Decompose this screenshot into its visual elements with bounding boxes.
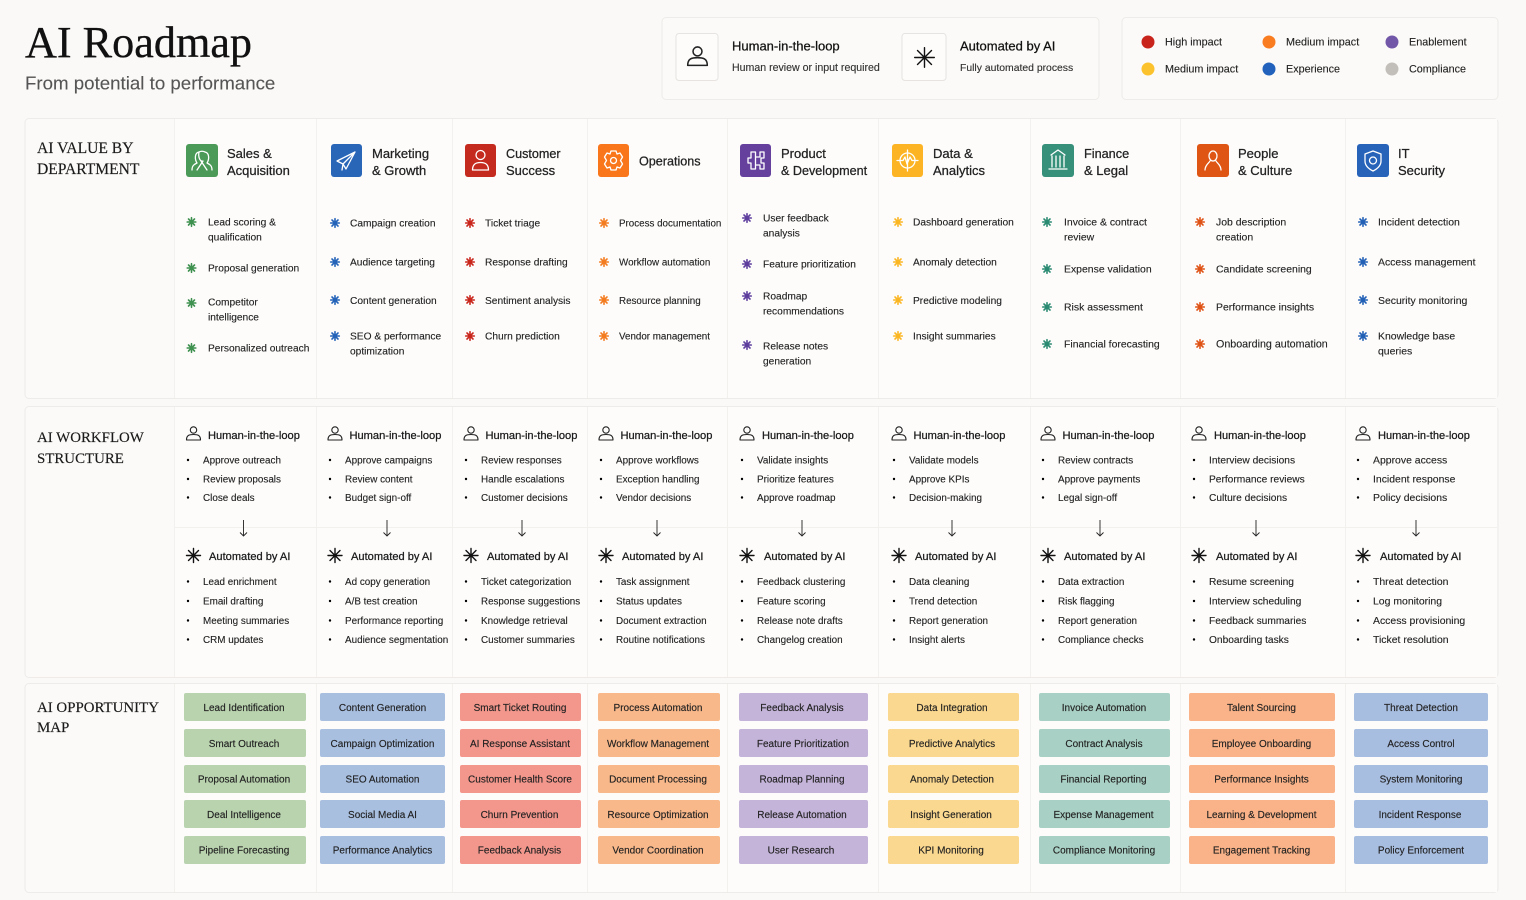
panel: AI opportunity map (25, 684, 1498, 892)
workflow: IT Security: Automated by AI (1380, 551, 1461, 563)
workflow: Product: Feature scoring (757, 596, 826, 608)
icon: customer (465, 144, 496, 177)
heading: Finance & Legal: Finance (1084, 147, 1129, 161)
list: operations value: Resource planning (619, 296, 701, 307)
list: IT value: Access management (1378, 258, 1476, 268)
workflow: Finance: Legal sign-off (1058, 493, 1117, 504)
list: IT value: Incident detection (1378, 218, 1460, 228)
opportunity column: Product: User Research (768, 846, 834, 856)
workflow: Marketing (328, 427, 448, 646)
heading: AI value by department: AI VALUE BY (37, 140, 133, 157)
list: customer value: Churn prediction (485, 332, 560, 342)
list: product value: User feedback (763, 214, 830, 224)
workflow: People (1192, 427, 1306, 646)
list: marketing value: SEO & performance (350, 332, 441, 342)
workflow: Product: Human-in-the-loop (762, 430, 854, 442)
heading: People & Culture: & Culture (1238, 163, 1292, 178)
workflow: IT Security: Threat detection (1373, 577, 1449, 588)
list: finance value: Risk assessment (1064, 302, 1143, 314)
workflow: People: Onboarding tasks (1209, 635, 1289, 646)
subtitle: From potential to performance (25, 72, 275, 94)
list: sales value: Lead scoring & (208, 218, 276, 228)
workflow: Data: Trend detection (909, 596, 977, 608)
opportunity column: Marketing: Content Generation (339, 703, 426, 714)
workflow: Operations: Document extraction (616, 616, 707, 627)
opportunity column: Sales: Smart Outreach (209, 739, 279, 750)
workflow: Customer Success: Ticket categorization (481, 577, 571, 588)
workflow: Marketing: Budget sign-off (345, 493, 412, 504)
workflow: Sales: Meeting summaries (203, 616, 289, 627)
opportunity column: Customer Success: AI Response Assistant (470, 739, 570, 750)
workflow: Operations: Approve workflows (616, 456, 699, 466)
list: IT value: Security monitoring (1378, 296, 1468, 307)
workflow: Marketing: Approve campaigns (345, 456, 432, 466)
workflow: Operations (599, 427, 712, 646)
list: marketing value: optimization (350, 346, 404, 358)
opportunity column: IT Security: Threat Detection (1384, 703, 1458, 714)
opportunity column: IT Security: Incident Response (1379, 810, 1462, 821)
icon: bank building (1042, 144, 1074, 177)
list: operations value: Workflow automation (619, 258, 710, 268)
list: product value: analysis (763, 228, 800, 240)
list: data value: Dashboard generation (913, 218, 1014, 228)
workflow: IT Security: Human-in-the-loop (1378, 430, 1470, 442)
workflow: Sales: Email drafting (203, 596, 263, 608)
opportunity column: Customer Success: Churn Prevention (481, 810, 558, 821)
opportunity column: Sales: Deal Intelligence (207, 810, 281, 821)
workflow: Sales: Human-in-the-loop (208, 430, 300, 442)
workflow: Customer Success: Automated by AI (487, 551, 568, 563)
list: data value (894, 218, 1014, 342)
workflow: IT Security (1356, 427, 1470, 646)
workflow: Operations: Vendor decisions (616, 493, 691, 504)
opportunity column: People: Performance Insights (1214, 774, 1309, 786)
workflow: Sales: Review proposals (203, 474, 281, 486)
legend label: automated by AI (960, 38, 1073, 74)
icon: automated star (902, 34, 946, 80)
list: people value: Candidate screening (1216, 264, 1312, 276)
department: Product & Development (740, 144, 868, 368)
workflow: Product: Validate insights (757, 456, 828, 466)
workflow: People: Resume screening (1209, 577, 1294, 588)
workflow: Finance: Compliance checks (1058, 635, 1144, 646)
heading: AI opportunity map: MAP (37, 720, 69, 736)
workflow: People: Interview scheduling (1209, 596, 1302, 608)
heading: AI workflow structure: AI WORKFLOW (37, 430, 145, 446)
list: finance value (1043, 218, 1160, 350)
heading: AI workflow structure: STRUCTURE (37, 451, 124, 467)
heading: Product & Development: & Development (781, 164, 868, 178)
department: Marketing & Growth (331, 144, 441, 358)
list: product value: Release notes (763, 342, 828, 352)
icon: paper plane (331, 144, 362, 177)
icon: gear (598, 144, 629, 177)
workflow: Marketing: Human-in-the-loop (350, 430, 441, 442)
workflow: Sales: CRM updates (203, 635, 263, 646)
list: product value: Roadmap (763, 292, 808, 302)
heading: Sales & Acquisition: Sales & (227, 146, 272, 161)
workflow: Finance: Human-in-the-loop (1062, 430, 1154, 442)
workflow: Operations: Routine notifications (616, 635, 705, 646)
opportunity column: Data: Data Integration (916, 703, 988, 714)
workflow: People: Human-in-the-loop (1214, 430, 1306, 442)
list: product value: recommendations (763, 306, 844, 318)
heading: Data & Analytics: Data & (933, 146, 973, 161)
workflow: Data (892, 427, 1005, 646)
workflow: Finance: Automated by AI (1064, 551, 1145, 563)
heading: IT Security: Security (1398, 163, 1445, 178)
workflow: Marketing: Automated by AI (351, 551, 432, 563)
opportunity column: Product: Feedback Analysis (760, 703, 844, 714)
icon: data target (892, 144, 923, 177)
list: people value: creation (1216, 232, 1253, 244)
list: product value (743, 214, 856, 368)
opportunity column: Sales (184, 693, 306, 864)
workflow: Product: Feedback clustering (757, 577, 845, 588)
workflow: Data: Decision-making (909, 493, 982, 504)
workflow: Operations: Task assignment (616, 577, 690, 588)
workflow: Marketing: Ad copy generation (345, 577, 430, 588)
heading: Sales & Acquisition: Acquisition (227, 163, 290, 178)
opportunity column: Customer Success: Feedback Analysis (478, 846, 561, 856)
workflow: Operations: Automated by AI (622, 551, 703, 563)
workflow: Data: Report generation (909, 616, 988, 627)
opportunity column: IT Security: Policy Enforcement (1378, 846, 1464, 856)
workflow: Customer Success: Response suggestions (481, 596, 580, 608)
list: data value: Insight summaries (913, 332, 996, 342)
icon: product modules (740, 144, 771, 177)
opportunity column: Product (739, 693, 868, 864)
heading: AI opportunity map: AI OPPORTUNITY (37, 700, 159, 716)
opportunity column: Finance: Contract Analysis (1065, 739, 1143, 750)
panel: AI value by department (25, 118, 1498, 398)
opportunity column: Operations: Resource Optimization (607, 810, 709, 821)
list: customer value: Sentiment analysis (485, 296, 571, 307)
list: operations value: Process documentation (619, 218, 721, 230)
workflow: Marketing: Performance reporting (345, 616, 443, 627)
heading: Finance & Legal: & Legal (1084, 163, 1128, 178)
workflow: IT Security: Access provisioning (1373, 616, 1465, 627)
opportunity column: People: Employee Onboarding (1212, 739, 1311, 750)
workflow: Sales: Lead enrichment (203, 577, 277, 588)
workflow: IT Security: Log monitoring (1373, 596, 1442, 608)
department: Operations (598, 144, 721, 342)
legend label: human-in-the-loop: Human review or input required (732, 62, 880, 74)
department: IT Security (1357, 144, 1476, 358)
list: people value: Onboarding automation (1216, 338, 1328, 350)
opportunity column: Product: Release Automation (757, 810, 847, 821)
opportunity column: Product: Roadmap Planning (759, 774, 845, 786)
list: product value: Feature prioritization (763, 260, 856, 270)
list: customer value: Ticket triage (485, 218, 540, 230)
heading: AI value by department: DEPARTMENT (37, 161, 140, 178)
legend label: human-in-the-loop (732, 38, 880, 74)
department: People & Culture (1196, 144, 1328, 350)
legend: impact colours: Compliance (1409, 64, 1466, 76)
department: Data & Analytics (892, 144, 1014, 342)
opportunity column: IT Security: Access Control (1387, 739, 1455, 750)
workflow: Sales: Approve outreach (203, 456, 281, 466)
workflow: Product (740, 427, 854, 646)
legend label: human-in-the-loop: Human-in-the-loop (732, 38, 840, 54)
workflow: Data: Approve KPIs (909, 474, 969, 486)
heading: Customer Success: Customer (506, 147, 561, 161)
opportunity column: Operations: Workflow Management (607, 739, 709, 750)
workflow: Sales: Close deals (203, 493, 255, 504)
workflow: IT Security: Approve access (1373, 456, 1447, 466)
icon: sales people (186, 144, 218, 177)
heading: Operations: Operations (639, 154, 701, 168)
legend: impact colours: Enablement (1409, 36, 1467, 48)
workflow: Product: Changelog creation (757, 635, 843, 646)
opportunity column: Finance: Compliance Monitoring (1053, 846, 1155, 856)
icon: human (676, 34, 718, 80)
department: Customer Success (465, 144, 571, 342)
workflow: Customer Success: Human-in-the-loop (486, 430, 577, 442)
workflow: People: Interview decisions (1209, 456, 1295, 466)
workflow: Finance: Approve payments (1058, 474, 1140, 486)
workflow: Operations: Status updates (616, 596, 682, 608)
list: people value: Job description (1216, 218, 1286, 228)
legend: impact colours: High impact (1165, 36, 1222, 48)
workflow: Sales: Automated by AI (209, 551, 290, 563)
workflow: Data: Human-in-the-loop (914, 430, 1005, 442)
workflow: Marketing: A/B test creation (345, 596, 417, 608)
workflow: Data: Data cleaning (909, 577, 969, 588)
workflow: Operations: Exception handling (616, 474, 699, 486)
opportunity column: Marketing: SEO Automation (346, 774, 419, 786)
workflow: Data: Insight alerts (909, 635, 965, 646)
list: sales value: intelligence (208, 312, 259, 324)
workflow: Customer Success: Customer summaries (481, 635, 575, 646)
opportunity column: Product: Feature Prioritization (757, 739, 849, 750)
opportunity column: Operations: Process Automation (614, 703, 702, 714)
department: Finance & Legal (1042, 144, 1160, 350)
icon: shield (1357, 144, 1389, 177)
workflow: Customer Success: Customer decisions (481, 493, 568, 504)
legend: impact colours: Medium impact (1286, 36, 1359, 48)
legend label: automated by AI: Automated by AI (960, 38, 1055, 54)
opportunity column: Operations (598, 693, 720, 864)
opportunity column: Operations: Document Processing (609, 774, 707, 786)
opportunity column: IT Security: System Monitoring (1380, 774, 1462, 786)
list: people value (1196, 218, 1328, 350)
list: sales value: Personalized outreach (208, 344, 309, 354)
legend: impact colours: Experience (1286, 64, 1340, 76)
workflow: People: Performance reviews (1209, 474, 1305, 486)
list: IT value (1359, 218, 1476, 358)
workflow: Finance (1041, 427, 1154, 646)
list: IT value: queries (1378, 346, 1412, 358)
list: data value: Predictive modeling (913, 296, 1002, 307)
workflow: Customer Success (464, 427, 580, 646)
opportunity column: IT Security (1354, 693, 1488, 864)
list: finance value: Expense validation (1064, 264, 1152, 276)
workflow: Product: Release note drafts (757, 616, 843, 627)
opportunity column: Data: KPI Monitoring (918, 846, 984, 856)
panel: AI workflow structure (25, 406, 1498, 678)
workflow: Marketing: Audience segmentation (345, 635, 448, 646)
opportunity column: Finance (1039, 693, 1170, 864)
icon: person (1197, 144, 1229, 177)
list: marketing value: Campaign creation (350, 218, 436, 230)
workflow: Customer Success: Knowledge retrieval (481, 616, 568, 627)
list: finance value: Financial forecasting (1064, 340, 1160, 350)
opportunity column: Marketing: Campaign Optimization (331, 739, 434, 750)
list: customer value: Response drafting (485, 258, 568, 268)
opportunity column: Marketing: Social Media AI (348, 810, 417, 821)
opportunity column: Finance: Financial Reporting (1060, 774, 1147, 786)
workflow: People: Feedback summaries (1209, 616, 1306, 627)
opportunity column: Sales: Lead Identification (203, 703, 285, 714)
opportunity column: Data (888, 693, 1019, 864)
workflow: Finance: Review contracts (1058, 456, 1133, 466)
workflow: Finance: Risk flagging (1058, 596, 1115, 608)
heading: Data & Analytics: Analytics (933, 163, 986, 178)
list: people value: Performance insights (1216, 302, 1314, 314)
heading: People & Culture: People (1238, 146, 1278, 161)
legend label: automated by AI: Fully automated process (960, 63, 1073, 74)
list: sales value: Proposal generation (208, 264, 299, 274)
opportunity column: Customer Success: Smart Ticket Routing (474, 703, 566, 714)
list: sales value: qualification (208, 232, 262, 244)
heading: Marketing & Growth: & Growth (372, 163, 426, 178)
list: finance value: Invoice & contract (1064, 218, 1147, 228)
opportunity column: Marketing: Performance Analytics (333, 846, 432, 856)
list: finance value: review (1064, 232, 1095, 244)
list: sales value (187, 218, 309, 354)
legend: workflow types (662, 18, 1099, 100)
workflow: Data: Validate models (909, 456, 979, 466)
list: sales value: Competitor (208, 298, 258, 308)
workflow: Finance: Data extraction (1058, 577, 1124, 588)
opportunity column: Customer Success: Customer Health Score (468, 774, 572, 786)
heading: Product & Development: Product (781, 146, 826, 161)
list: marketing value: Content generation (350, 296, 437, 307)
list: product value: generation (763, 356, 811, 368)
opportunity column: People: Learning & Development (1206, 810, 1317, 821)
list: IT value: Knowledge base (1378, 332, 1455, 342)
opportunity column: Data: Insight Generation (910, 810, 992, 821)
heading: IT Security: IT (1398, 146, 1410, 161)
workflow: Customer Success: Review responses (481, 456, 562, 466)
opportunity column: Operations: Vendor Coordination (612, 846, 704, 856)
workflow: Customer Success: Handle escalations (481, 474, 565, 486)
legend: impact colours: Medium impact (1165, 64, 1238, 76)
workflow: Marketing: Review content (345, 474, 413, 486)
heading: Marketing & Growth: Marketing (372, 146, 429, 161)
opportunity column: Customer Success (460, 693, 581, 864)
opportunity column: Data: Anomaly Detection (910, 774, 994, 786)
workflow: Product: Automated by AI (764, 551, 845, 563)
opportunity column: Sales: Pipeline Forecasting (199, 846, 289, 856)
list: marketing value: Audience targeting (350, 258, 435, 268)
opportunity column: Finance: Invoice Automation (1062, 703, 1146, 714)
heading: Customer Success: Success (506, 163, 556, 178)
workflow: IT Security: Policy decisions (1373, 493, 1447, 504)
opportunity column: Finance: Expense Management (1053, 810, 1154, 821)
list: customer value (466, 218, 571, 342)
opportunity column: Sales: Proposal Automation (198, 774, 290, 786)
workflow: Sales (186, 427, 300, 646)
workflow: Finance: Report generation (1058, 616, 1137, 627)
workflow: Product: Prioritize features (757, 474, 834, 486)
legend: impact colours (1122, 18, 1498, 100)
opportunity column: People: Engagement Tracking (1213, 846, 1310, 856)
opportunity column: People (1189, 693, 1335, 864)
department: Sales & Acquisition (186, 144, 309, 354)
opportunity column: Data: Predictive Analytics (909, 739, 995, 750)
opportunity column: Marketing (320, 693, 445, 864)
workflow: IT Security: Ticket resolution (1373, 635, 1449, 646)
workflow: People: Automated by AI (1216, 551, 1297, 563)
title: AI Roadmap (25, 18, 252, 67)
list: marketing value (331, 218, 441, 358)
opportunity column: People: Talent Sourcing (1227, 703, 1296, 714)
list: operations value (600, 218, 721, 342)
workflow: Product: Approve roadmap (757, 493, 836, 504)
workflow: Operations: Human-in-the-loop (620, 430, 712, 442)
workflow: Data: Automated by AI (915, 551, 996, 563)
workflow: IT Security: Incident response (1373, 474, 1456, 486)
workflow: People: Culture decisions (1209, 493, 1287, 504)
list: operations value: Vendor management (619, 332, 710, 342)
list: data value: Anomaly detection (913, 258, 997, 268)
